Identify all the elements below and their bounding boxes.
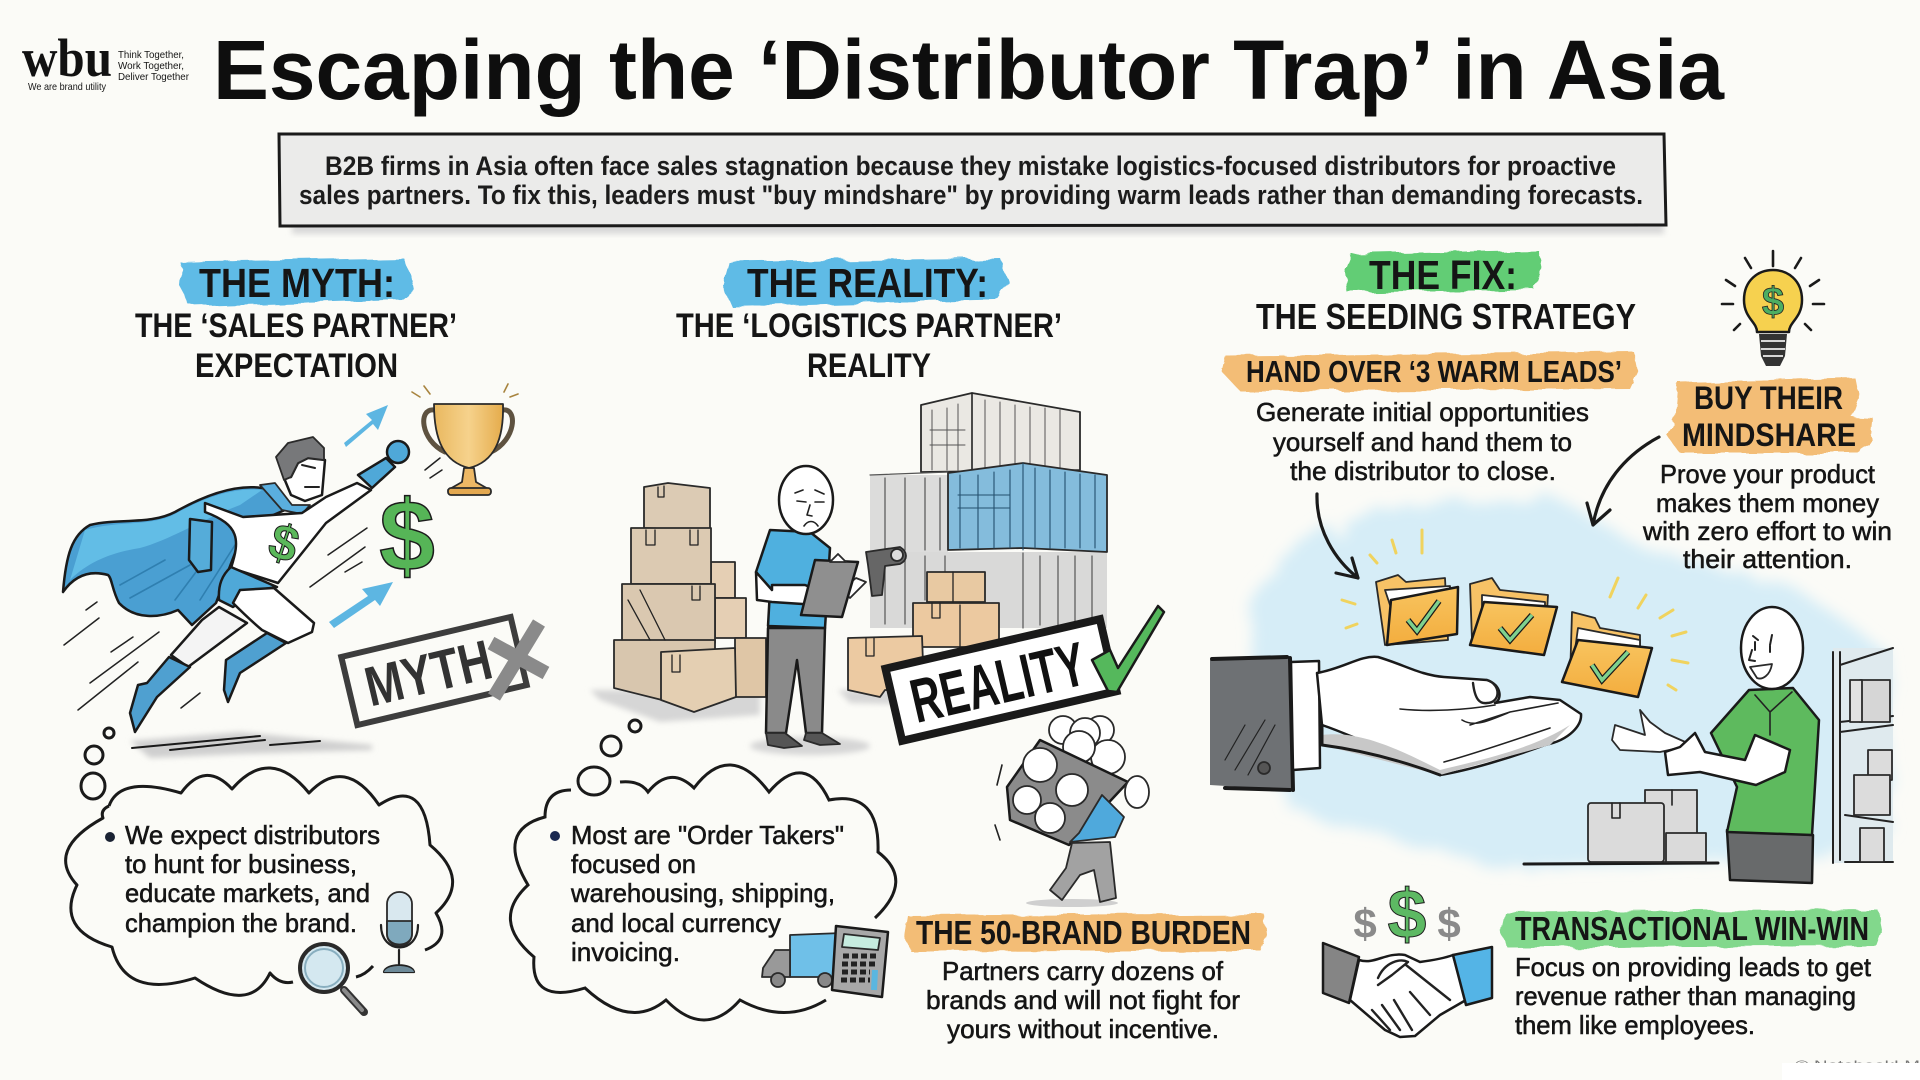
panel: the reality bbox=[510, 258, 1266, 1044]
callout: myth cloud bbox=[66, 768, 453, 995]
text: buy their mindshare: their attention. bbox=[1683, 544, 1852, 574]
panel: the fix bbox=[1210, 250, 1893, 1040]
heading: the reality: REALITY bbox=[807, 347, 931, 385]
text: buy their mindshare: with zero effort to win bbox=[1642, 516, 1892, 546]
icon: stacked boxes right bbox=[838, 572, 999, 705]
summary box: sales partners. To fix this, leaders must "buy mindshare" by providing warm leads rather than demanding forecasts. bbox=[299, 180, 1643, 210]
callout: reality cloud: invoicing. bbox=[571, 937, 680, 967]
heading: the fix bbox=[1256, 250, 1636, 337]
icon: dollar sign: $ bbox=[379, 480, 435, 592]
stamp: myth: MYTH bbox=[359, 627, 498, 718]
text: buy their mindshare: makes them money bbox=[1656, 488, 1879, 518]
icon: dollar signs: $ bbox=[1353, 900, 1377, 947]
callout: reality cloud: Most are "Order Takers" bbox=[571, 820, 844, 850]
heading: the myth: THE MYTH: bbox=[199, 260, 395, 306]
icon: overloaded person bbox=[995, 716, 1149, 907]
icon: magnifier bbox=[300, 944, 364, 1012]
icon: trophy bbox=[412, 384, 518, 495]
icon: giving hand bbox=[1210, 657, 1581, 790]
watermark remnant: © NotebookLM bbox=[1795, 1058, 1920, 1072]
text: buy their mindshare: MINDSHARE bbox=[1682, 417, 1856, 453]
icon: shelf bbox=[1833, 648, 1893, 863]
callout: myth cloud: to hunt for business, bbox=[125, 849, 357, 879]
text: hand over warm leads: yourself and hand them to bbox=[1273, 427, 1572, 457]
icon: myth x mark bbox=[491, 623, 546, 697]
text: transactional win-win: revenue rather than managing bbox=[1515, 981, 1856, 1011]
text: transactional win-win: them like employees. bbox=[1515, 1010, 1755, 1040]
heading: the reality: THE ‘LOGISTICS PARTNER’ bbox=[676, 307, 1062, 345]
thought bubbles bbox=[81, 728, 114, 799]
callout: reality cloud: warehousing, shipping, bbox=[570, 878, 835, 908]
title: Escaping the ‘Distributor Trap’ in Asia bbox=[213, 23, 1725, 117]
text: the 50-brand burden bbox=[905, 914, 1266, 1044]
icon: sad warehouse worker bbox=[750, 466, 906, 755]
text: hand over warm leads bbox=[1222, 352, 1638, 486]
icon: shipping containers bbox=[870, 393, 1107, 628]
icon: lightbulb: $ bbox=[1762, 280, 1784, 324]
heading: the myth: THE ‘SALES PARTNER’ bbox=[135, 307, 457, 345]
text: buy their mindshare: BUY THEIR bbox=[1694, 380, 1843, 416]
watermark remnant bbox=[1782, 1058, 1920, 1080]
logo: wbu: Deliver Together bbox=[118, 72, 190, 83]
callout: reality cloud bbox=[510, 765, 896, 1020]
icon: dollar signs bbox=[1353, 875, 1461, 953]
heading: the reality bbox=[676, 258, 1062, 385]
text: buy their mindshare: Prove your product bbox=[1660, 459, 1876, 489]
icon: green check bbox=[1092, 606, 1164, 692]
text: the 50-brand burden: Partners carry dozens of bbox=[942, 956, 1224, 986]
icon: calculator bbox=[832, 926, 888, 997]
callout: reality cloud: focused on bbox=[571, 849, 696, 879]
thought bubbles bbox=[578, 720, 641, 795]
icon: lightbulb bbox=[1722, 251, 1824, 366]
heading: the myth: EXPECTATION bbox=[195, 347, 398, 385]
icon: flying superhero: $ bbox=[262, 512, 306, 574]
heading: the fix: THE SEEDING STRATEGY bbox=[1256, 296, 1636, 337]
icon: happy distributor bbox=[1612, 607, 1819, 883]
logo: wbu: Work Together, bbox=[118, 61, 184, 72]
arrow: leads to folders bbox=[1317, 494, 1358, 578]
icon: delivery truck bbox=[762, 933, 842, 987]
panel: the myth bbox=[63, 258, 546, 1012]
icon: lead folders bbox=[1342, 530, 1688, 697]
text: the 50-brand burden: yours without incentive. bbox=[947, 1014, 1219, 1044]
logo: wbu: Think Together, bbox=[118, 50, 184, 61]
icon: grey boxes bbox=[1524, 790, 1718, 864]
callout: myth cloud: educate markets, and bbox=[125, 878, 370, 908]
callout: myth cloud: champion the brand. bbox=[125, 908, 357, 938]
heading: the reality: THE REALITY: bbox=[747, 260, 988, 306]
stamp: reality bbox=[885, 619, 1117, 741]
icon: dollar signs: $ bbox=[1437, 900, 1461, 947]
summary box: B2B firms in Asia often face sales stagnation because they mistake logistics-focused distributors for proactive bbox=[325, 151, 1616, 181]
text: buy their mindshare bbox=[1642, 378, 1892, 574]
text: transactional win-win bbox=[1500, 910, 1882, 1040]
icon: stacked boxes left bbox=[590, 483, 766, 722]
blue wash background bbox=[1245, 500, 1890, 870]
heading: the myth bbox=[135, 258, 457, 385]
logo: wbu: We are brand utility bbox=[28, 81, 107, 93]
icon: handshake bbox=[1323, 943, 1492, 1037]
text: hand over warm leads: HAND OVER ‘3 WARM LEADS’ bbox=[1246, 354, 1622, 389]
logo: wbu bbox=[22, 28, 190, 93]
text: transactional win-win: Focus on providing leads to get bbox=[1515, 952, 1872, 982]
text: the 50-brand burden: THE 50-BRAND BURDEN bbox=[916, 914, 1251, 951]
icon: flying superhero bbox=[63, 437, 442, 758]
callout: myth cloud: We expect distributors bbox=[125, 820, 380, 850]
icon: rising arrows bbox=[329, 405, 393, 628]
icon: dollar signs: $ bbox=[1388, 875, 1426, 953]
text: the 50-brand burden: brands and will not fight for bbox=[926, 985, 1240, 1015]
text: hand over warm leads: the distributor to close. bbox=[1290, 456, 1556, 486]
stamp: reality: REALITY bbox=[904, 630, 1092, 737]
text: hand over warm leads: Generate initial opportunities bbox=[1256, 397, 1589, 427]
heading: the fix: THE FIX: bbox=[1369, 252, 1517, 298]
callout: reality cloud: and local currency bbox=[571, 908, 781, 938]
icon: microphone bbox=[381, 892, 418, 972]
summary box bbox=[279, 134, 1666, 234]
arrow: mindshare to exchange bbox=[1587, 437, 1659, 525]
logo: wbu: wbu bbox=[22, 28, 112, 88]
